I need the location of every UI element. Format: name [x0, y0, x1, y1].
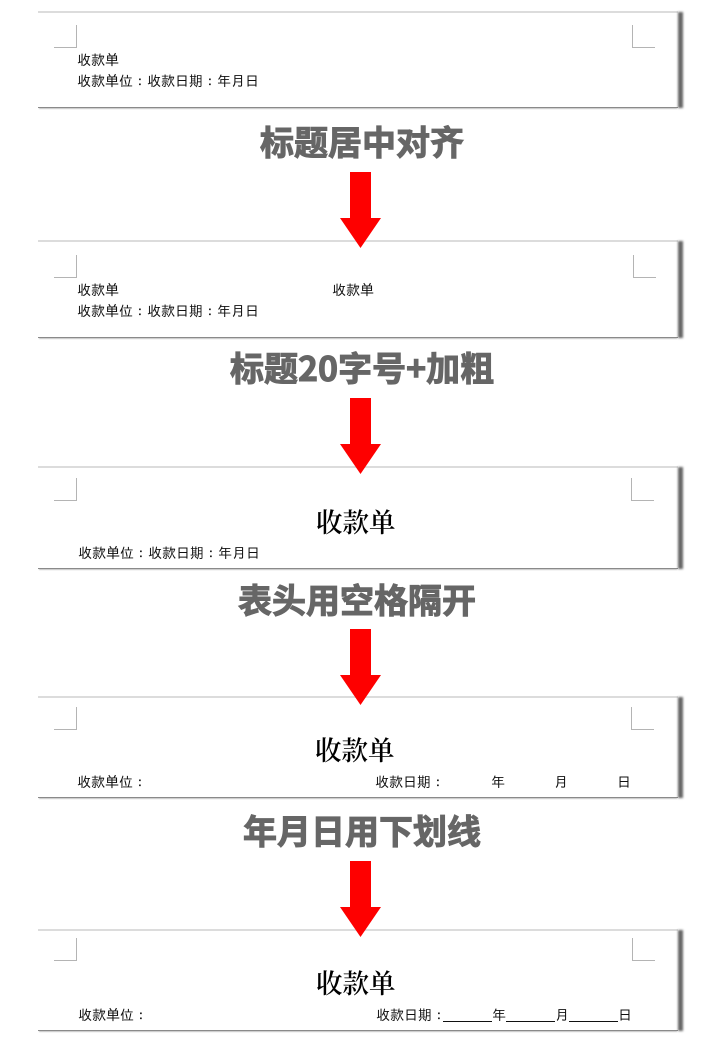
panel: step 5 document	[38, 929, 678, 1031]
day: 日	[617, 775, 631, 789]
underline month	[506, 1021, 555, 1022]
header line: 收款单位：收款日期：年月日	[78, 546, 260, 560]
panel: step 3 document	[38, 466, 678, 569]
month: 月	[554, 775, 568, 789]
bold title: 收款单	[315, 729, 394, 768]
title text centered: 收款单	[332, 283, 374, 297]
crop mark right	[632, 938, 655, 961]
heading: underline for date: 年月日用下划线	[243, 805, 481, 854]
arrow 2	[340, 398, 381, 474]
payee label: 收款单位：	[77, 775, 147, 789]
underline year	[443, 1021, 492, 1022]
panel: step 1 document	[38, 11, 678, 108]
day: 日	[618, 1008, 632, 1022]
date label: 收款日期：	[375, 775, 445, 789]
crop mark left	[54, 255, 77, 278]
arrow 4	[340, 861, 381, 937]
panel: step 4 document	[38, 696, 678, 798]
month: 月	[555, 1008, 569, 1022]
crop mark left	[54, 938, 77, 961]
crop mark right	[631, 478, 654, 501]
crop mark right	[631, 707, 654, 730]
crop mark left	[54, 707, 77, 730]
arrow 3	[340, 629, 381, 705]
payee label: 收款单位：	[78, 1008, 148, 1022]
year: 年	[491, 775, 505, 789]
crop mark left	[54, 478, 77, 501]
date label: 收款日期：	[376, 1008, 446, 1022]
heading: separate header with spaces: 表头用空格隔开	[238, 574, 476, 623]
heading: center the title: 标题居中对齐	[260, 116, 464, 165]
panel: step 2 document	[38, 240, 678, 338]
heading: size 20 and bold: 标题20字号+加粗	[230, 342, 494, 391]
crop mark left	[54, 25, 77, 48]
crop mark right	[633, 255, 656, 278]
crop mark right	[632, 25, 655, 48]
header line: 收款单位：收款日期：年月日	[77, 74, 259, 88]
bold title: 收款单	[316, 962, 396, 1001]
arrow 1	[340, 172, 381, 248]
bold title: 收款单	[316, 501, 396, 540]
title text: 收款单	[77, 53, 119, 67]
year: 年	[492, 1008, 506, 1022]
title text left: 收款单	[77, 283, 119, 297]
underline day	[569, 1021, 618, 1022]
header line: 收款单位：收款日期：年月日	[77, 304, 259, 318]
